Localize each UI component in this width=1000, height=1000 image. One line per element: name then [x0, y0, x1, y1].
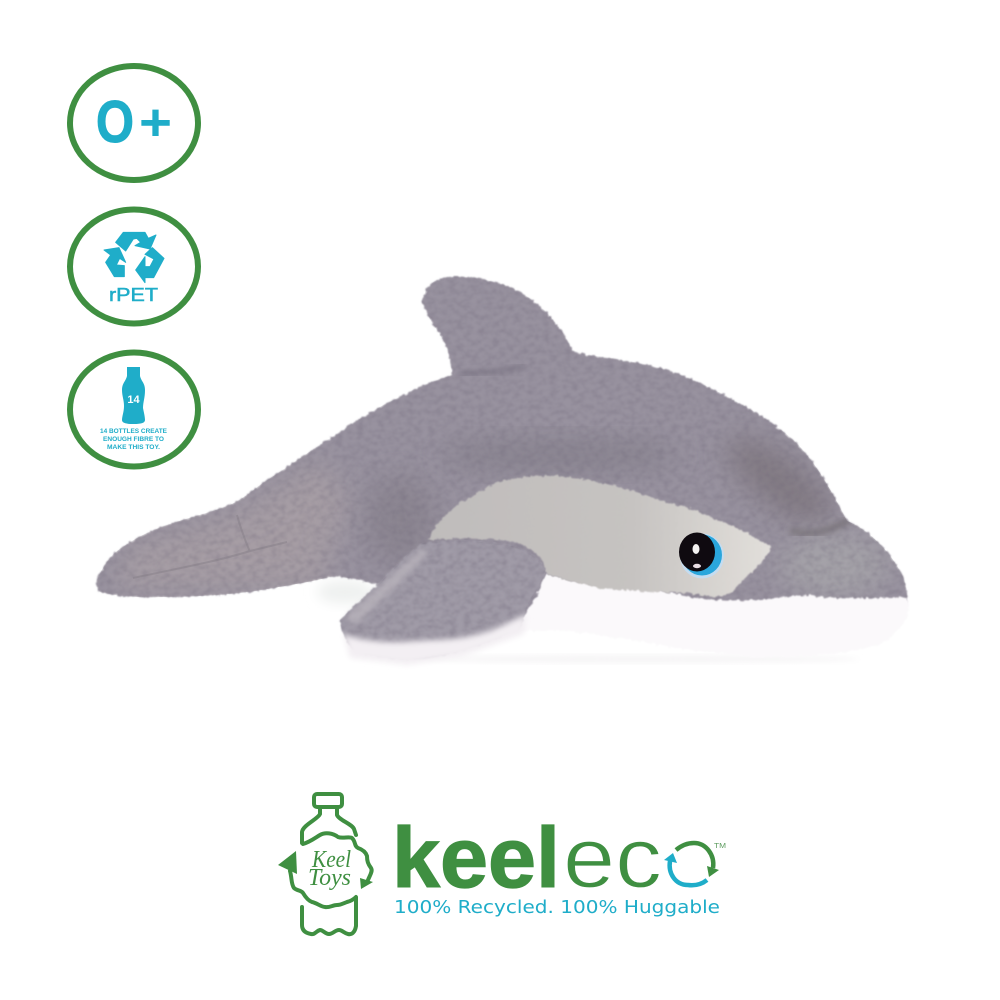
icon: recycling arrows: [104, 232, 164, 283]
grey cheek patch: [428, 476, 772, 597]
flipper fur and pale rim: [340, 542, 544, 664]
bottle caption: 14 BOTTLES CREATE: [100, 428, 167, 435]
icon: eye: [679, 532, 724, 578]
badge: 14 bottles: [70, 352, 198, 466]
tail crease: [133, 515, 287, 578]
badge: 14 bottles: 14: [127, 394, 140, 406]
keeleco logo: [278, 794, 726, 934]
bottle caption: ENOUGH FIBRE TO: [103, 436, 164, 443]
white belly: [515, 573, 909, 657]
icon: bottle: [122, 367, 145, 424]
keel toys script: Keel: [311, 847, 351, 873]
trademark: TM: [714, 843, 726, 850]
badge: age 0+: [70, 66, 198, 180]
flipper: [340, 541, 545, 660]
keel toys script: [308, 847, 351, 891]
fur texture: [100, 276, 908, 600]
badge: rPET: [70, 210, 198, 324]
floor shadow: [317, 580, 860, 663]
badge: age 0+: O: [96, 89, 134, 155]
badge: age 0+: +: [139, 94, 172, 152]
badge: rPET: rPET: [109, 285, 158, 305]
keel toys script: Toys: [308, 865, 351, 891]
dolphin body: [96, 276, 907, 640]
icon: recycling o: [664, 843, 719, 885]
bottle caption: MAKE THIS TOY.: [107, 444, 160, 451]
icon: recycled bottle: [290, 794, 372, 934]
wordmark: keel: [392, 811, 560, 906]
keeleco logo: ec: [563, 811, 662, 906]
tagline: 100% Recycled. 100% Huggable: [394, 897, 720, 918]
bottle caption: [100, 428, 167, 451]
shading: [90, 270, 920, 650]
icon: bottle arrowheads: [278, 851, 373, 889]
dolphin plush toy: [90, 270, 920, 665]
